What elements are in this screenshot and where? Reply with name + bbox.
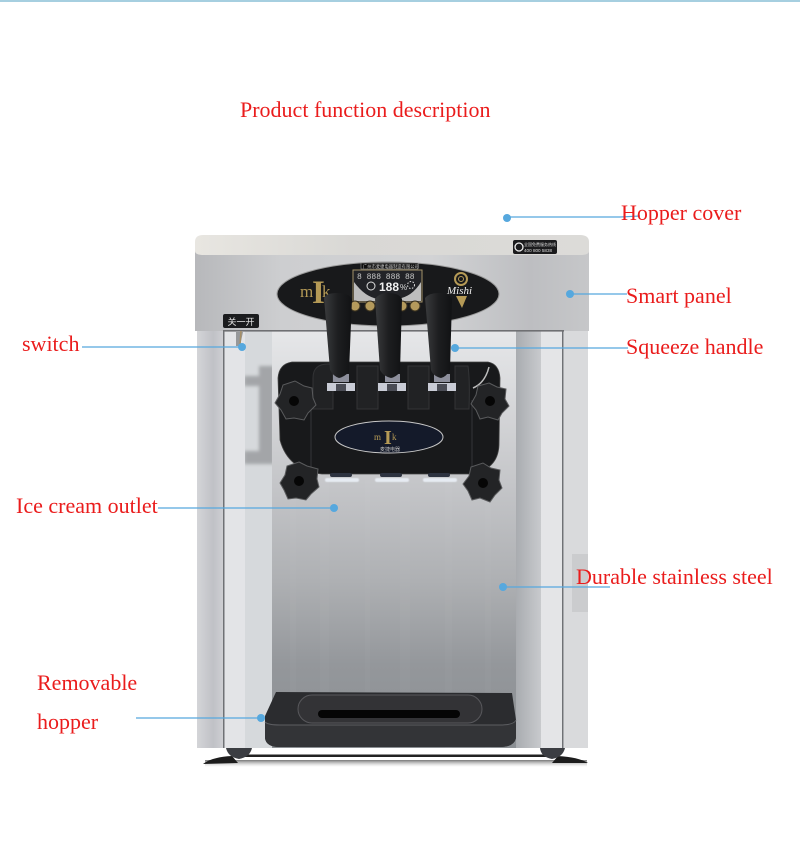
drip tray — [265, 692, 516, 747]
cone logo: Mishi — [446, 285, 472, 297]
decorative top strip — [0, 0, 800, 2]
body handle shadow — [244, 366, 274, 464]
ice cream machine — [195, 235, 589, 767]
LCD display — [353, 263, 422, 302]
callout: ice cream outlet: Ice cream outlet — [16, 493, 158, 518]
machine shadow — [203, 754, 588, 767]
cone logo — [446, 273, 472, 308]
panel logo: m — [300, 282, 313, 301]
phone badge — [513, 240, 557, 254]
door logo — [335, 421, 443, 453]
control panel oval — [277, 262, 499, 326]
panel buttons — [350, 301, 420, 311]
callout: durable stainless steel — [499, 564, 773, 591]
panel logo: k — [322, 282, 331, 301]
title: Product function description — [240, 97, 491, 122]
machine feet — [226, 748, 565, 759]
door logo: 麦捷电器 — [380, 446, 400, 453]
machine body — [197, 331, 588, 748]
outlets — [325, 473, 457, 482]
phone badge: 400 800 5838 — [524, 248, 553, 253]
callout: removable hopper: Removable — [37, 670, 137, 695]
callout: switch: switch — [22, 331, 79, 356]
callout: hopper cover: Hopper cover — [621, 200, 742, 225]
phone badge: 全国免费服务热线 — [524, 241, 556, 247]
LCD display: 广州市麦捷电器制造有限公司 — [363, 263, 419, 270]
door logo: k — [392, 432, 397, 442]
LCD display: % — [400, 283, 407, 292]
panel logo — [300, 275, 331, 311]
handle guards — [313, 364, 469, 409]
callout: ice cream outlet — [16, 493, 338, 518]
squeeze handles — [324, 293, 452, 378]
top panel — [195, 235, 589, 332]
power switch — [223, 314, 259, 346]
callout: smart panel — [566, 283, 732, 308]
callout: squeeze handle — [451, 334, 763, 359]
star knobs — [275, 381, 509, 502]
door logo: m — [374, 432, 381, 442]
LCD display: 8 888 888 88 — [357, 273, 415, 282]
callout: squeeze handle: Squeeze handle — [626, 334, 763, 359]
brackets — [327, 374, 456, 391]
wire — [473, 367, 489, 388]
callout: durable stainless steel: Durable stainless steel — [576, 564, 773, 589]
door logo: I — [384, 427, 392, 449]
LCD display: 188 — [379, 280, 399, 294]
callout: removable hopper — [37, 670, 265, 734]
power switch: 关一开 — [227, 316, 255, 327]
callout: smart panel: Smart panel — [626, 283, 732, 308]
callout: removable hopper: hopper — [37, 709, 99, 734]
dispenser head — [275, 293, 509, 502]
callout: hopper cover — [503, 200, 742, 225]
panel logo: I — [312, 275, 325, 311]
callout: switch — [22, 331, 246, 356]
